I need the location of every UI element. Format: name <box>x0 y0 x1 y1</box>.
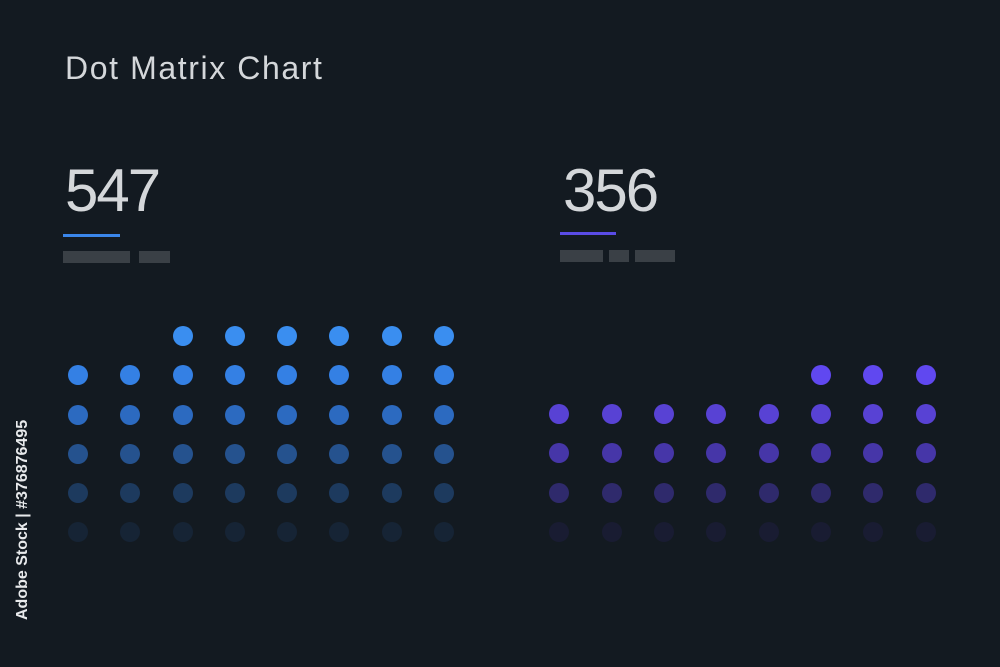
number 547: 547 <box>65 157 159 224</box>
placeholder bars <box>63 251 170 263</box>
panel: left metric <box>63 157 170 263</box>
placeholder bars <box>560 250 675 262</box>
title: Dot Matrix Chart <box>65 50 324 86</box>
chart: blue dot matrix <box>68 326 454 542</box>
accent line blue <box>63 234 120 237</box>
accent line purple <box>560 232 616 235</box>
chart: purple dot matrix <box>549 365 936 542</box>
number 356: 356 <box>563 157 657 224</box>
panel: right metric <box>560 157 675 262</box>
side watermark text: Adobe Stock | #376876495 <box>14 420 31 620</box>
